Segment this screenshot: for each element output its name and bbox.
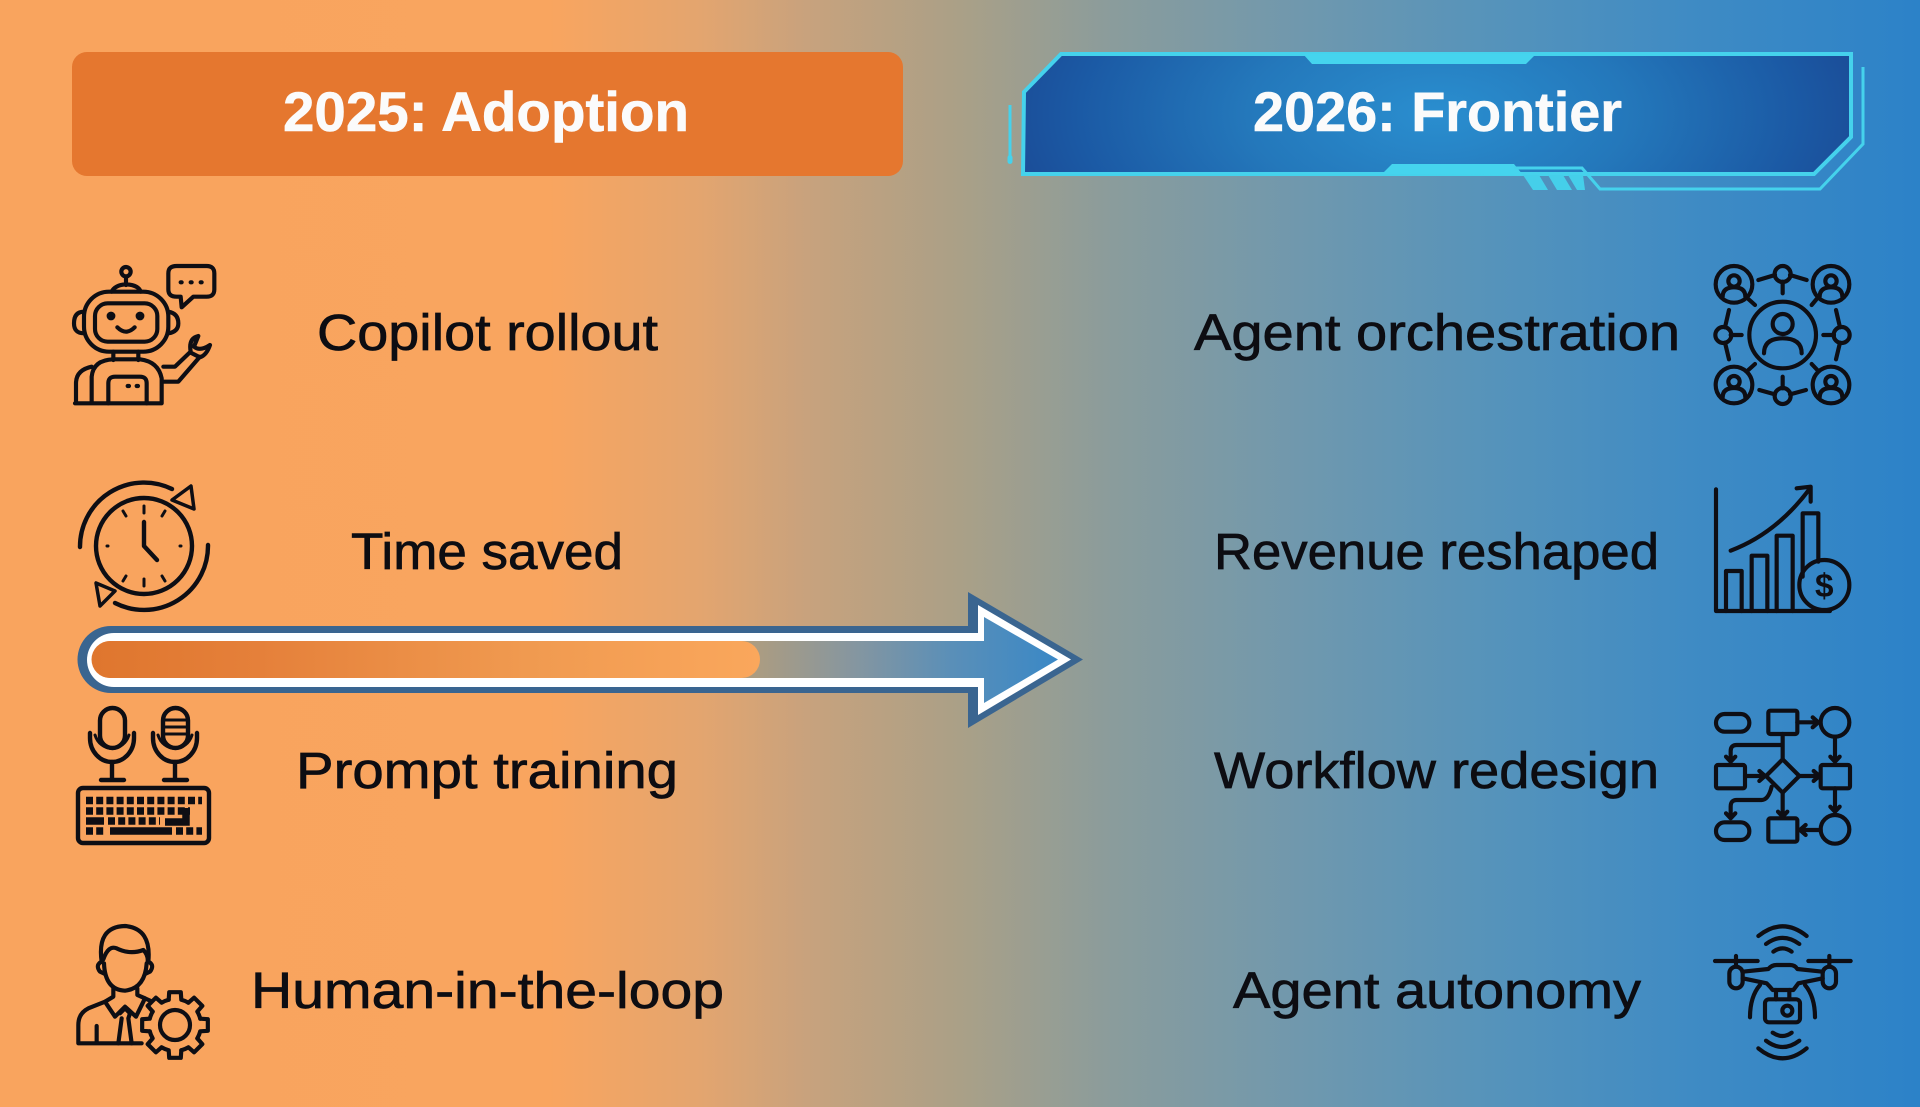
panel: 2026 frontier column: [1008, 54, 1863, 1058]
text: Prompt training: Prompt training: [296, 742, 678, 799]
text: Time saved: Time saved: [351, 523, 623, 580]
text: Human-in-the-loop: Human-in-the-loop: [251, 962, 724, 1019]
panel: 2025 adoption column: [72, 52, 903, 1058]
arrow: transition from 2025 to 2026: [77, 592, 1083, 728]
text: Agent autonomy: Agent autonomy: [1233, 962, 1642, 1019]
progress bar fill: [92, 641, 760, 678]
heading: 2026 Frontier: [1008, 54, 1863, 190]
text: Agent orchestration: Agent orchestration: [1194, 304, 1680, 361]
text: Copilot rollout: Copilot rollout: [317, 304, 658, 361]
heading: 2025 Adoption: 2025: Adoption: [283, 80, 689, 143]
icon: clock with cycle arrows: [80, 483, 208, 610]
icon: agent network: [1715, 266, 1850, 404]
text: Workflow redesign: Workflow redesign: [1214, 742, 1659, 799]
icon: microphones and keyboard: [78, 708, 209, 843]
text: Revenue reshaped: Revenue reshaped: [1214, 523, 1659, 580]
icon: autonomous drone: [1715, 926, 1851, 1058]
heading: 2025 Adoption: [72, 52, 903, 176]
icon: workflow diagram: [1716, 708, 1850, 844]
icon: robot copilot: [74, 266, 214, 403]
heading: 2026 Frontier: 2026: Frontier: [1253, 80, 1622, 143]
icon: revenue chart with coin: $: [1815, 568, 1834, 605]
icon: revenue chart with coin: [1716, 487, 1849, 611]
icon: person with gear: [78, 926, 208, 1058]
